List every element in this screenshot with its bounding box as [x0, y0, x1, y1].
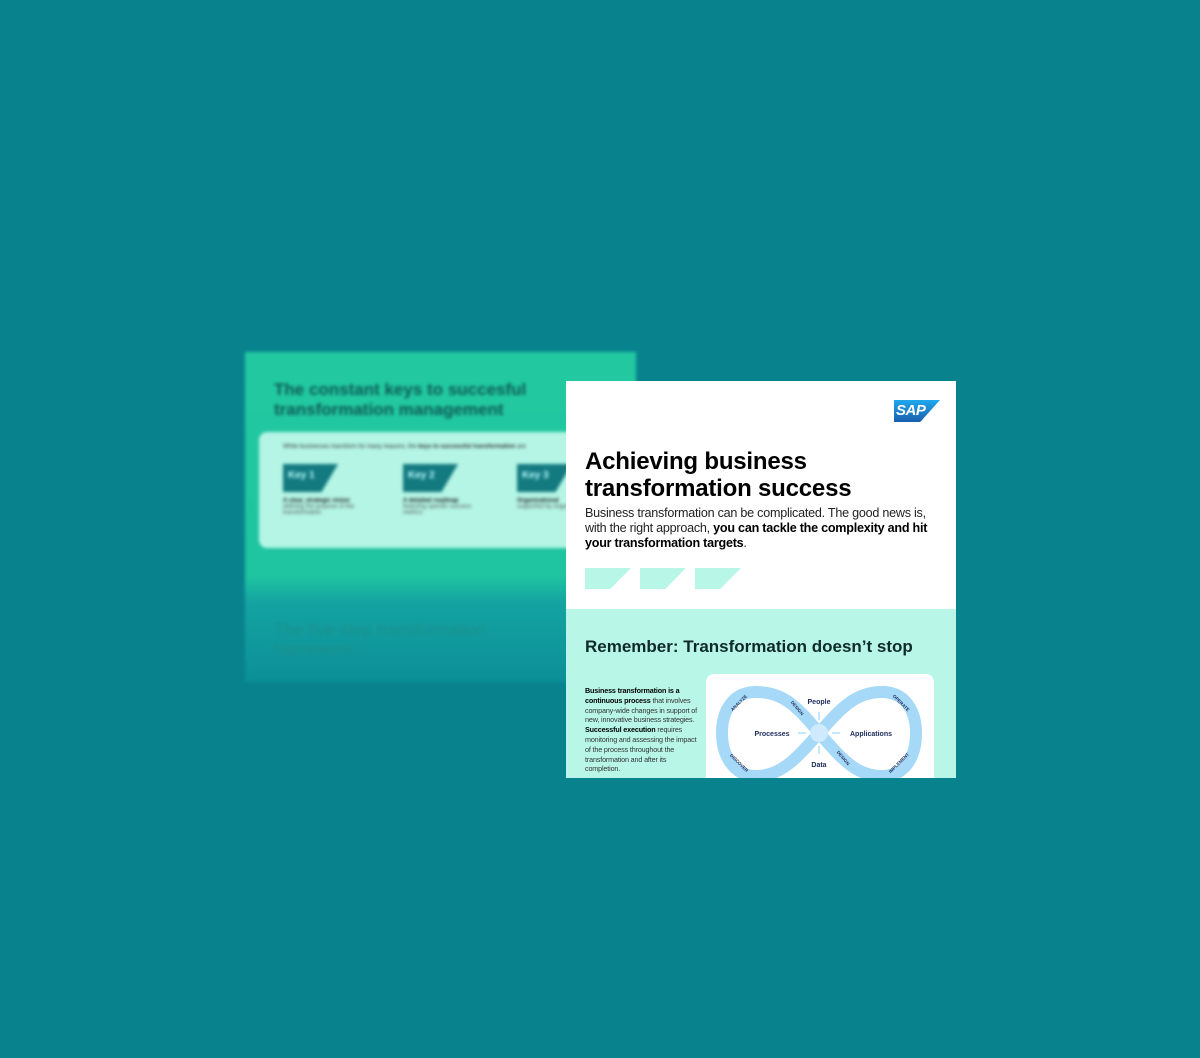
key 2: Key 2	[408, 470, 435, 481]
key 2: featuring specific success metrics	[403, 504, 471, 516]
heading: five-step: framework	[274, 640, 353, 659]
key 3	[514, 462, 575, 511]
panel: keys box	[259, 432, 589, 548]
title: Achieving business	[585, 448, 807, 475]
chart: infinity loop: Data	[811, 762, 827, 769]
heading: five-step	[274, 620, 486, 659]
key 3: Organizational	[517, 498, 559, 504]
key 1	[280, 462, 356, 516]
key 3: supported by ongoing	[517, 504, 575, 510]
panel: back card (blurred)	[245, 352, 636, 682]
logo: SAP	[894, 400, 940, 422]
chart: infinity loop: DESIGN	[790, 700, 805, 716]
heading: five-step: The five-step transformation	[274, 620, 486, 639]
intro text: Business transformation can be complicated. The good news is, with the right approach, you can tackle the complexity and hit your transformation targets.	[585, 506, 927, 550]
heading: keys: transformation management	[274, 400, 504, 419]
chart: infinity loop: Applications	[850, 731, 892, 738]
decorative shapes	[585, 568, 741, 589]
chart: infinity loop: DISCOVER	[729, 753, 750, 774]
heading: keys	[272, 380, 528, 420]
key 2: A detailed roadmap	[403, 498, 458, 504]
key 2	[400, 462, 472, 516]
key 1: A clear, strategic vision	[283, 498, 350, 504]
title	[585, 448, 851, 502]
chart: infinity loop: DESIGN	[836, 750, 851, 766]
logo: SAP: SAP	[896, 402, 925, 419]
chart: infinity loop: People	[808, 699, 831, 706]
chart: infinity loop	[706, 674, 934, 784]
panel: front card	[566, 381, 956, 778]
heading: remember: Remember: Transformation doesn’t stop	[585, 637, 913, 656]
chart: infinity loop: ANALYZE	[730, 694, 748, 712]
chart: infinity loop: OPERATE	[892, 694, 910, 712]
text block: Business transformation is a continuous process that involves company-wide changes in support of new, innovative business strategies. Successful execution requires monitoring and assessing the impact of the process throughout the transformation and after its completion.	[585, 686, 697, 773]
title: transformation success	[585, 475, 851, 502]
panel: keys box: While businesses transform for many reasons, the keys to successful transformation are	[283, 444, 526, 450]
key 1: defining the purpose of the transformation	[283, 504, 354, 516]
chart: infinity loop: Processes	[754, 731, 790, 738]
key 3: Key 3	[522, 470, 549, 481]
chart: infinity loop: IMPLEMENT	[888, 752, 910, 774]
panel: remember section	[566, 609, 956, 779]
key 1: Key 1	[288, 470, 315, 481]
heading: keys: The constant keys to succesful	[274, 380, 526, 399]
